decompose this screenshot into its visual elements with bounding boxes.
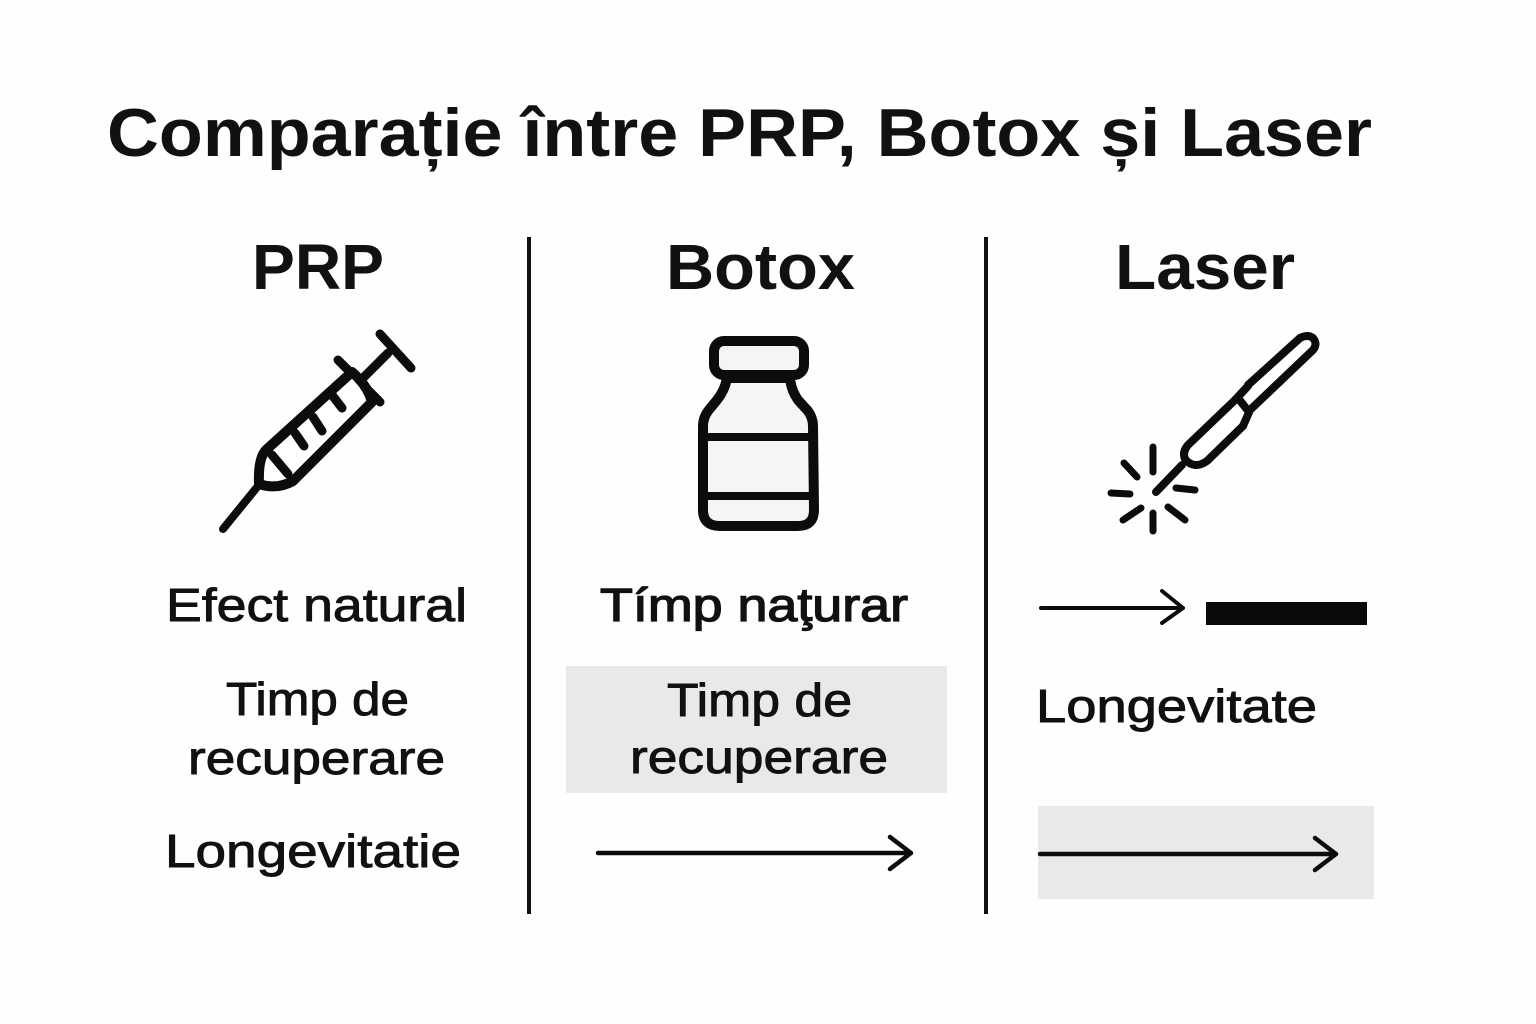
heading: Botox: Botox — [666, 231, 855, 303]
arrow and bar: Laser row one — [1041, 591, 1367, 625]
text: Longevitatie: Longevitatie — [165, 825, 461, 877]
text: Tímp naţurar: Tímp naţurar — [600, 579, 908, 631]
icon: laser pen — [1111, 336, 1316, 531]
heading: PRP: PRP — [252, 231, 384, 303]
panel: Laser — [1036, 231, 1374, 899]
text: Timp de recuperare: Timp de — [226, 673, 409, 725]
highlighted cell: Timp de recuperare: Timp de — [667, 674, 852, 726]
text: Longevitate: Longevitate — [1036, 680, 1317, 732]
highlighted cell: Timp de recuperare — [566, 666, 947, 793]
panel: Botox — [566, 231, 947, 869]
panel: PRP — [165, 231, 467, 877]
icon: syringe — [223, 334, 411, 529]
heading: Laser: Laser — [1115, 231, 1295, 303]
text: Efect natural: Efect natural — [166, 579, 467, 631]
icon: vial — [703, 341, 814, 526]
highlighted cell: Timp de recuperare: recuperare — [630, 731, 888, 783]
highlighted cell: arrow — [1038, 806, 1374, 899]
title: Comparație între PRP, Botox și Laser — [107, 95, 1372, 172]
arrow: Botox longevity — [598, 837, 911, 869]
text: Timp de recuperare: recuperare — [188, 732, 445, 784]
text: Timp de recuperare — [188, 673, 445, 784]
